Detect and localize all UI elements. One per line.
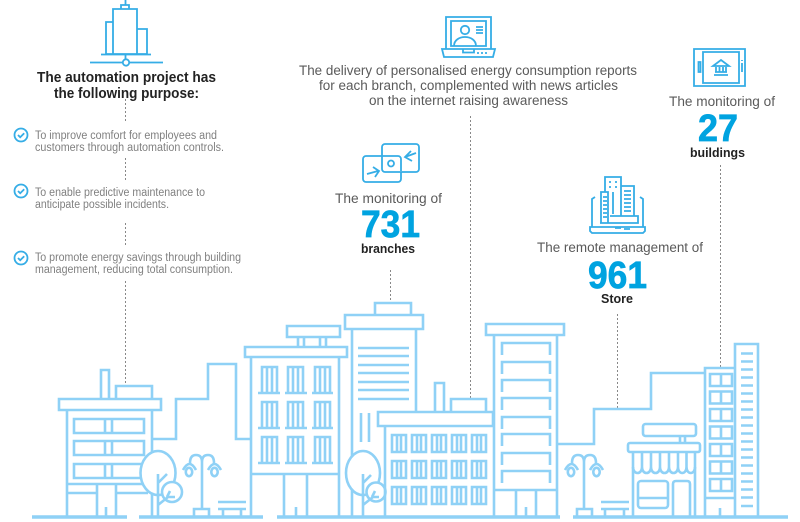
shop xyxy=(628,424,700,517)
bench 2 xyxy=(601,502,629,517)
stat: 27 buildings: 27 xyxy=(698,108,738,150)
street lamp 2 xyxy=(565,455,603,517)
stat: 731 branches xyxy=(335,191,442,256)
stat: 27 buildings: The monitoring of xyxy=(669,94,775,109)
bench 1 xyxy=(218,502,246,517)
dotted connector lines xyxy=(126,99,720,408)
stat: 961 store: Store xyxy=(601,292,633,306)
icon: tablet with bank xyxy=(694,49,745,86)
tree pair 1 xyxy=(140,451,182,517)
distant skyline left xyxy=(152,364,251,439)
building: office block xyxy=(59,370,161,517)
icon: connected branches xyxy=(363,144,419,182)
building: low block xyxy=(378,383,493,517)
stat: 961 store: 961 xyxy=(588,255,647,297)
icon: laptop with profile xyxy=(442,17,495,57)
icon: laptop with towers xyxy=(590,177,645,233)
text: personalised energy reports xyxy=(299,63,637,108)
bullet: predictive maintenance xyxy=(14,184,205,211)
heading: automation project: The automation project has xyxy=(37,70,216,86)
stat: 27 buildings: buildings xyxy=(690,146,745,160)
bullet: energy savings: To promote energy savings through building xyxy=(35,252,241,264)
distant skyline right xyxy=(557,373,705,444)
text: personalised energy reports: for each branch, complemented with news articles xyxy=(319,78,618,93)
building: tower xyxy=(345,303,423,517)
stat: 961 store xyxy=(537,240,703,306)
building: narrow tower xyxy=(735,344,758,517)
ground line xyxy=(32,515,788,519)
text: personalised energy reports: on the internet raising awareness xyxy=(369,93,568,108)
bullet: energy savings xyxy=(14,252,241,276)
bullet: improve comfort: customers through automation controls. xyxy=(35,142,224,154)
text: personalised energy reports: The delivery of personalised energy consumption reports xyxy=(299,63,637,78)
stat: 731 branches: 731 xyxy=(361,204,420,246)
stat: 731 branches: branches xyxy=(361,242,415,256)
bullet: energy savings: management, reducing total consumption. xyxy=(35,264,233,276)
heading: automation project xyxy=(37,70,216,102)
bullet: predictive maintenance: To enable predictive maintenance to xyxy=(35,187,205,199)
building: apartments xyxy=(245,326,347,517)
bullet: improve comfort: To improve comfort for employees and xyxy=(35,130,217,142)
heading: automation project: the following purpose: xyxy=(54,86,199,102)
bullet: predictive maintenance: anticipate possible incidents. xyxy=(35,199,169,211)
building: tall slab xyxy=(486,324,564,517)
icon: office buildings xyxy=(90,0,163,66)
stat: 961 store: The remote management of xyxy=(537,240,703,255)
tree pair 2 xyxy=(346,451,386,517)
stat: 731 branches: The monitoring of xyxy=(335,191,442,206)
building: windowed tower xyxy=(705,368,735,517)
city skyline illustration xyxy=(32,303,788,517)
purpose list xyxy=(14,128,241,276)
stat: 27 buildings xyxy=(669,94,775,160)
bullet: improve comfort xyxy=(14,128,224,154)
street lamp 1 xyxy=(183,455,221,517)
